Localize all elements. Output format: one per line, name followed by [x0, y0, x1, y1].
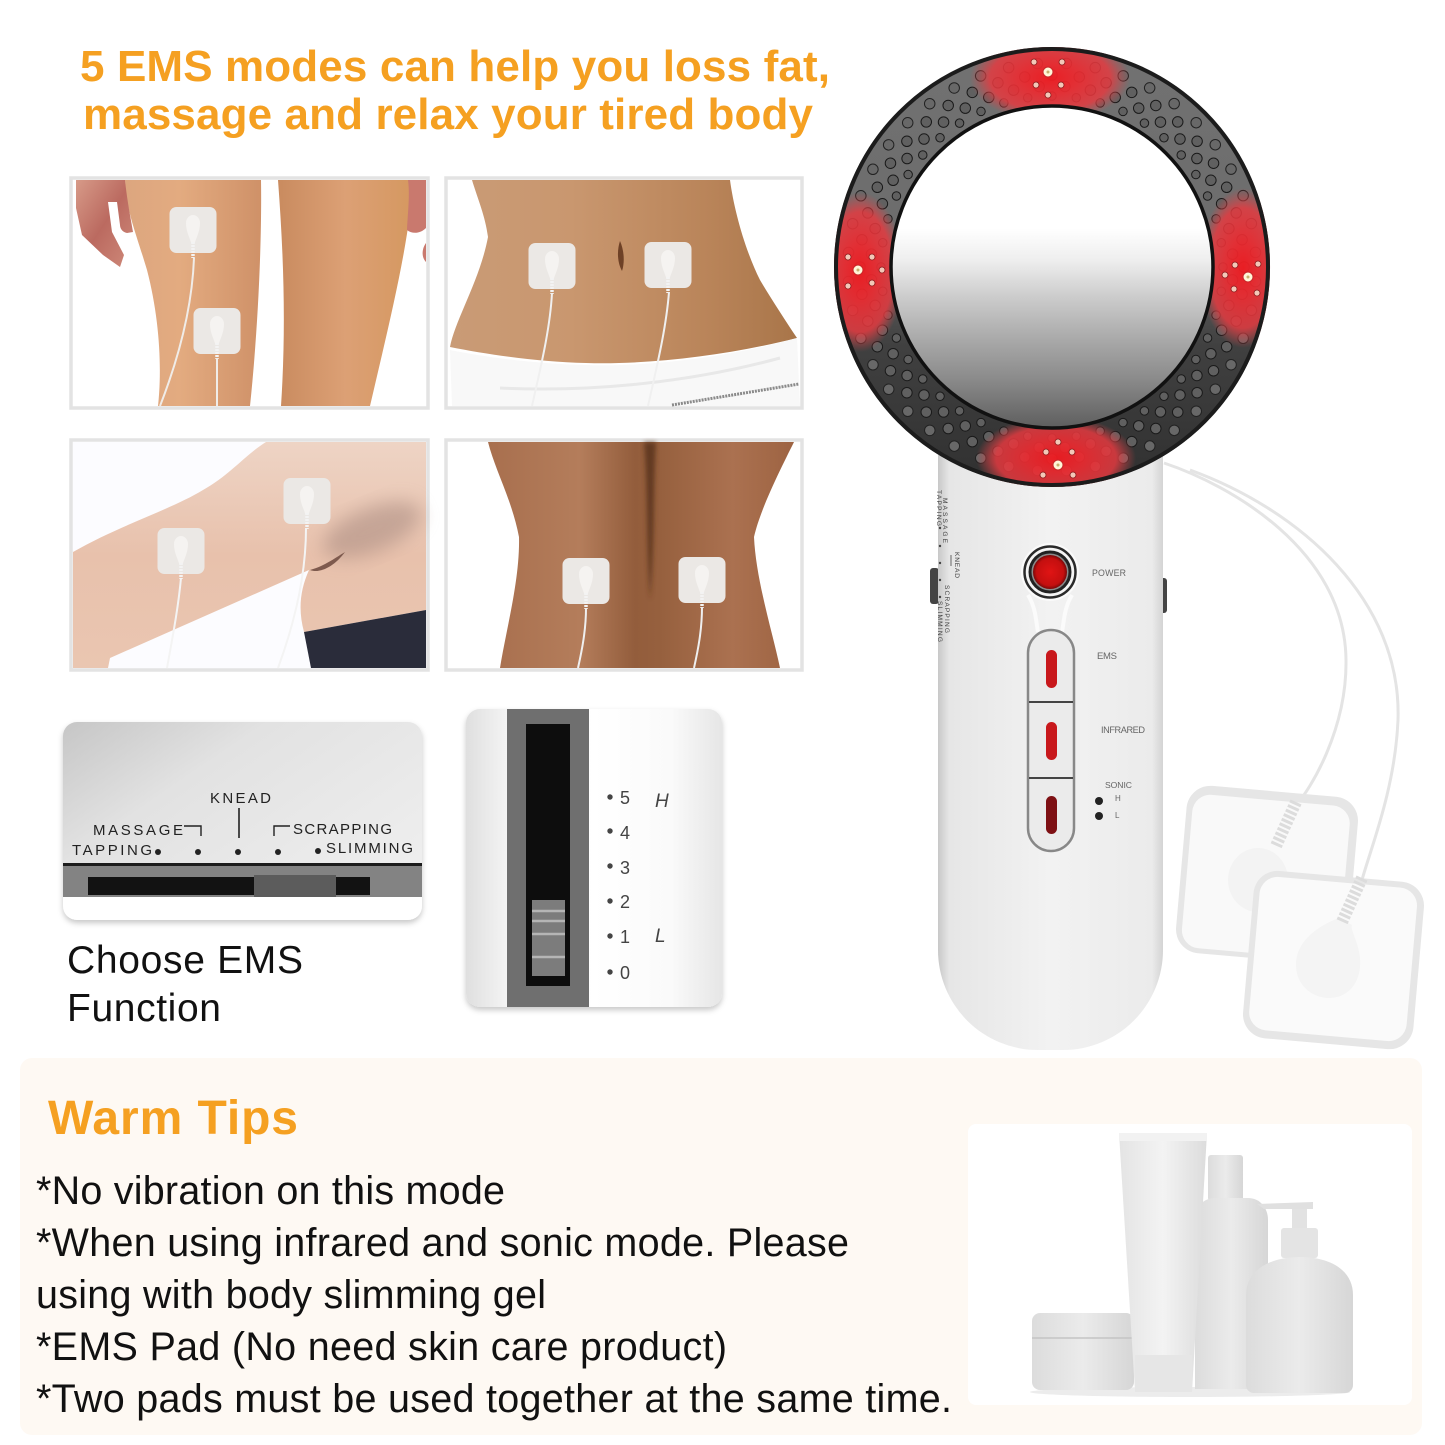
panel: EMS function switch close-up: TAPPING [72, 842, 152, 859]
control labels [1092, 568, 1145, 820]
control labels: EMS [1097, 651, 1117, 662]
side function labels: MASSAGE [941, 498, 948, 544]
photo: electrodes on arm [71, 440, 428, 670]
tips list: *No vibration on this mode [36, 1169, 505, 1213]
panel: EMS function switch close-up: KNEAD [210, 790, 271, 807]
image: skincare bottles [968, 1124, 1412, 1405]
side function labels: TAPPING [935, 490, 942, 526]
caption: choose EMS function: Choose EMS [67, 939, 303, 982]
tips list: *Two pads must be used together at the same time. [36, 1377, 952, 1421]
title [80, 42, 830, 139]
product: red light ring head with mirror [834, 47, 1270, 487]
LED dots [845, 59, 1261, 478]
side function labels: SCRAPPING [943, 585, 950, 633]
control labels: INFRARED [1101, 725, 1145, 735]
panel: intensity slider close-up: 1 [620, 927, 630, 947]
panel: EMS function switch close-up: MASSAGE [93, 822, 183, 839]
panel: EMS function switch close-up [63, 722, 422, 920]
side function labels: KNEAD [953, 552, 960, 578]
product: electrode pads and cables [1164, 463, 1426, 1051]
title: massage and relax your tired body [83, 90, 814, 139]
control labels: SONIC [1105, 780, 1132, 790]
tips list: *When using infrared and sonic mode. Please [36, 1221, 849, 1265]
panel: intensity slider close-up [466, 709, 722, 1007]
panel: EMS function switch close-up: SLIMMING [326, 840, 413, 857]
panel: intensity slider close-up: 5 [620, 788, 630, 808]
heading: warm tips: Warm Tips [48, 1092, 298, 1145]
red glow zones [834, 47, 1270, 487]
panel: intensity slider close-up: 4 [620, 823, 630, 843]
panel: intensity slider close-up: H [655, 791, 669, 812]
control labels: POWER [1092, 568, 1126, 578]
bubble texture [848, 63, 1256, 471]
caption: choose EMS function [67, 939, 303, 1030]
panel: intensity slider close-up: 3 [620, 858, 630, 878]
title: 5 EMS modes can help you loss fat, [80, 42, 830, 91]
panel: EMS function switch close-up: SCRAPPING [293, 821, 392, 838]
product: slimming device body [930, 455, 1167, 1050]
panel: intensity slider close-up: 2 [620, 892, 630, 912]
tips list [36, 1169, 952, 1421]
control buttons [1028, 630, 1074, 851]
side function labels [935, 490, 960, 642]
power button [1021, 543, 1079, 601]
control labels: L [1115, 811, 1120, 820]
photo: electrodes on abdomen [446, 178, 802, 408]
tips list: *EMS Pad (No need skin care product) [36, 1325, 727, 1369]
side function labels: SLIMMING [936, 601, 943, 642]
photo: electrodes on legs [71, 178, 428, 408]
photo: electrodes on lower back [446, 440, 802, 670]
panel: intensity slider close-up: L [655, 926, 666, 947]
control labels: H [1115, 794, 1121, 803]
panel: warm tips [20, 1058, 1422, 1435]
tips list: using with body slimming gel [36, 1273, 546, 1317]
caption: choose EMS function: Function [67, 987, 221, 1030]
front pad [1241, 869, 1426, 1051]
back pad [1174, 784, 1360, 966]
panel: intensity slider close-up: 0 [620, 963, 630, 983]
